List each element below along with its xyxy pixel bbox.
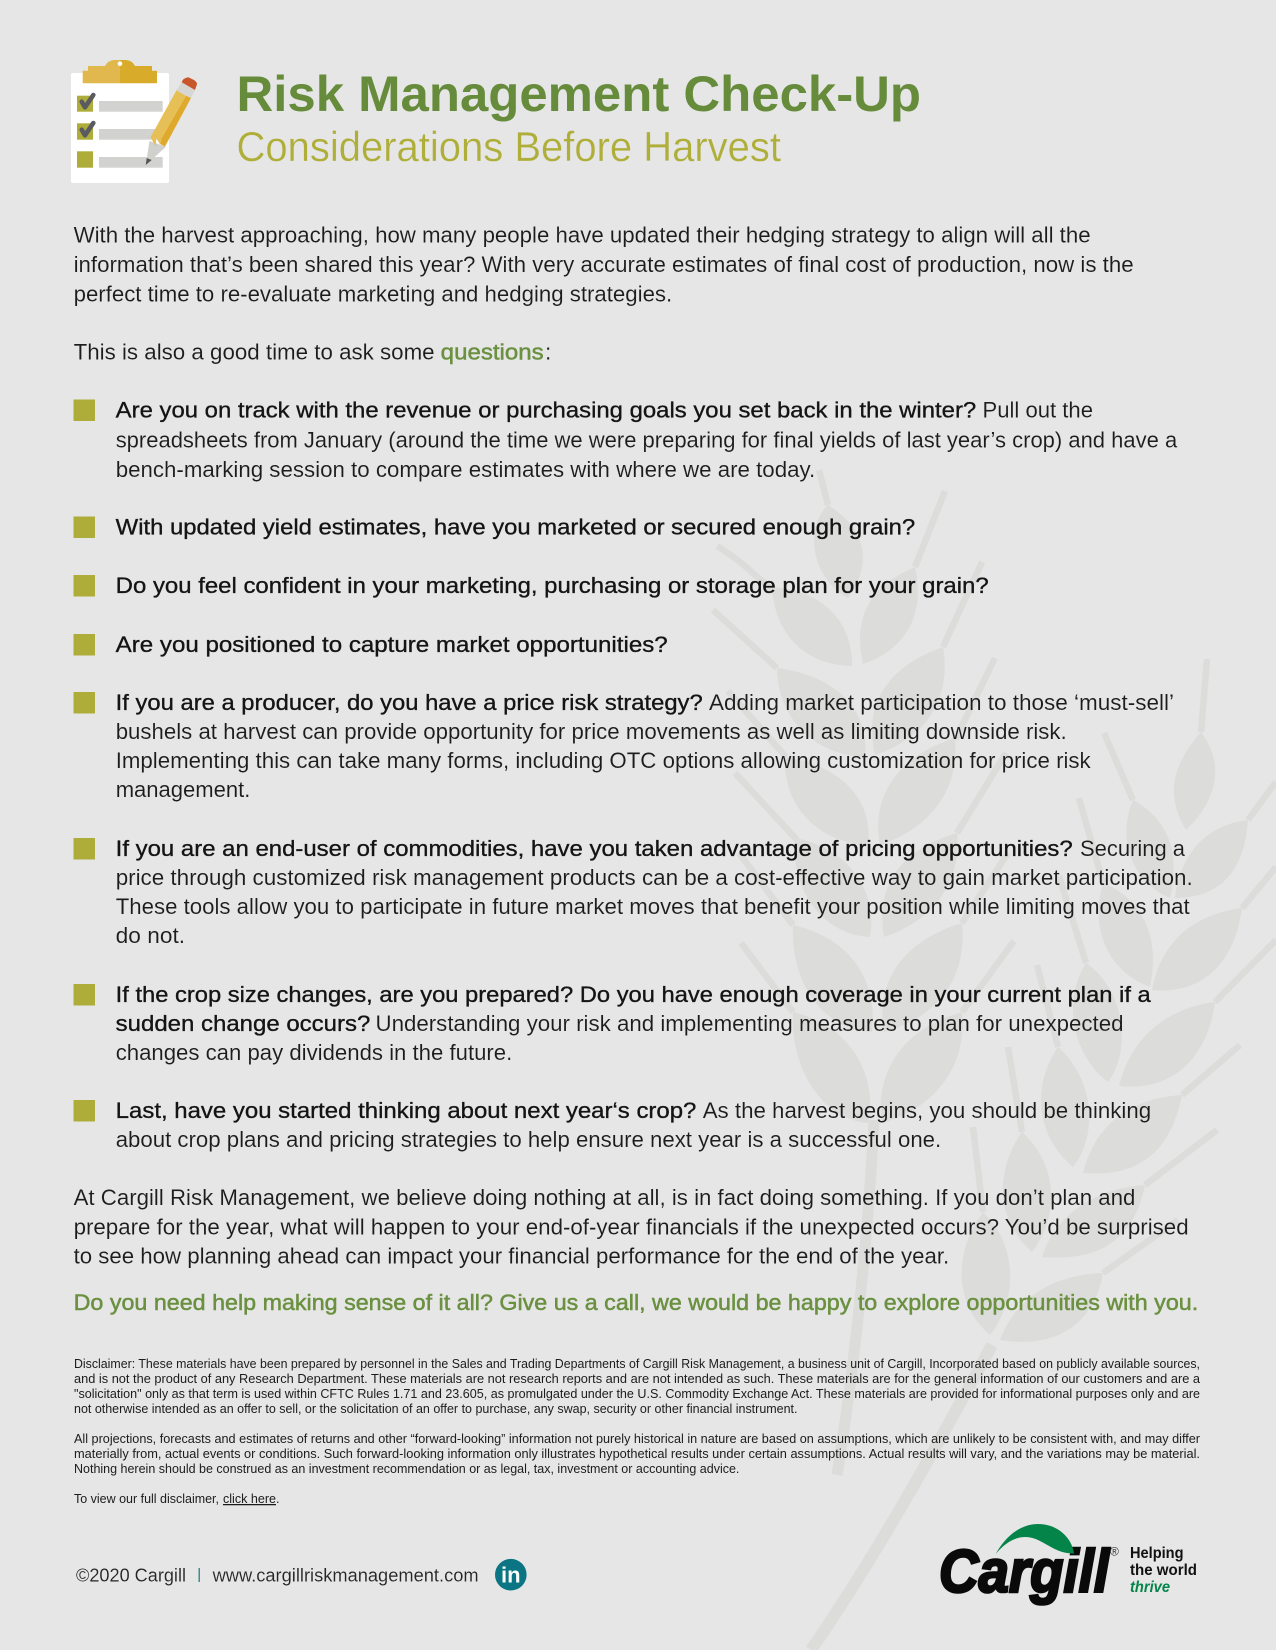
question 1 — [74, 397, 1178, 482]
intro paragraph: information that’s been shared this year? With very accurate estimates of final cost of production, now is the — [74, 252, 1134, 277]
question 6: do not. — [116, 923, 185, 948]
intro paragraph: perfect time to re-evaluate marketing and hedging strategies. — [74, 282, 672, 306]
question 7 — [74, 982, 1151, 1065]
question 7: sudden change occurs? — [116, 1011, 370, 1036]
question 6 — [74, 836, 1193, 948]
Cargill logo: the world — [1130, 1562, 1197, 1579]
full disclaimer link line: To view our full disclaimer, — [74, 1492, 219, 1506]
question 8 — [74, 1098, 1151, 1152]
question 1: spreadsheets from January (around the time we were preparing for final yields of last year’s crop) and have a — [116, 428, 1178, 452]
questions lead-in: questions — [441, 339, 544, 364]
disclaimer paragraph 1: not otherwise intended as an offer to sell, or the solicitation of an offer to purchase, any swap, security or other financial instrument. — [74, 1402, 798, 1416]
question 4: Are you positioned to capture market opportunities? — [116, 632, 668, 657]
closing paragraph — [74, 1185, 1189, 1268]
footer copyright and website: ©2020 Cargill — [76, 1565, 186, 1586]
disclaimer paragraph 1: "solicitation" only as that term is used within CFTC Rules 1.71 and 23.605, as promulgated under the U.S. Commodity Exchange Act. These materials are provided for informational purposes only and are — [74, 1387, 1200, 1401]
full disclaimer link line: click here — [223, 1492, 276, 1506]
full disclaimer link line: . — [276, 1492, 280, 1506]
closing paragraph: to see how planning ahead can impact your financial performance for the end of the year. — [74, 1244, 949, 1268]
questions lead-in: This is also a good time to ask some — [74, 339, 435, 364]
intro paragraph: With the harvest approaching, how many people have updated their hedging strategy to align will all the — [74, 223, 1091, 248]
question 5: If you are a producer, do you have a price risk strategy? — [116, 690, 703, 715]
question 1: Pull out the — [982, 397, 1093, 422]
question 6: Securing a — [1080, 836, 1185, 861]
call to action: Do you need help making sense of it all? Give us a call, we would be happy to explore opportunities with you. — [74, 1290, 1198, 1315]
subtitle: Considerations Before Harvest — [236, 123, 781, 170]
closing paragraph: At Cargill Risk Management, we believe doing nothing at all, is in fact doing something. If you don’t plan and — [74, 1185, 1135, 1210]
question 5 — [74, 690, 1174, 802]
question 5: Adding market participation to those ‘must-sell’ — [709, 690, 1174, 715]
icon: LinkedIn — [495, 1559, 527, 1590]
question 6: These tools allow you to participate in future market moves that benefit your position while limiting moves that — [116, 894, 1190, 919]
question 7: Understanding your risk and implementing measures to plan for unexpected — [376, 1011, 1124, 1036]
question 6: If you are an end-user of commodities, have you taken advantage of pricing opportunities? — [116, 836, 1073, 861]
question 1: Are you on track with the revenue or purchasing goals you set back in the winter? — [116, 397, 976, 422]
footer copyright and website: www.cargillriskmanagement.com — [212, 1565, 479, 1586]
title: Risk Management Check-Up — [236, 66, 921, 122]
Cargill logo — [939, 1524, 1197, 1605]
question 3: Do you feel confident in your marketing, purchasing or storage plan for your grain? — [116, 573, 989, 598]
question 5: bushels at harvest can provide opportunity for price movements as well as limiting downside risk. — [116, 719, 1067, 744]
disclaimer paragraph 1: and is not the product of any Research Department. These materials are not research reports and are not intended as such. These materials are for the general information of our customers and are a — [74, 1372, 1200, 1386]
question 6: price through customized risk management products can be a cost-effective way to gain market participation. — [116, 865, 1193, 890]
question 7: changes can pay dividends in the future. — [116, 1040, 512, 1065]
icon: LinkedIn: in — [501, 1562, 521, 1588]
question 5: management. — [116, 777, 250, 802]
Cargill logo: Cargill — [939, 1538, 1110, 1605]
Cargill logo: ® — [1110, 1544, 1119, 1558]
Cargill logo: Helping — [1130, 1545, 1184, 1562]
question 8: about crop plans and pricing strategies to help ensure next year is a successful one. — [116, 1127, 941, 1152]
closing paragraph: prepare for the year, what will happen to your end-of-year financials if the unexpected occurs? You’d be surprised — [74, 1214, 1189, 1240]
footer copyright and website — [76, 1565, 479, 1586]
background wheat illustration — [713, 470, 1276, 1650]
disclaimer paragraph 1: Disclaimer: These materials have been prepared by personnel in the Sales and Trading Departments of Cargill Risk Management, a business unit of Cargill, Incorporated based on publicly available sources, — [74, 1357, 1200, 1371]
question 1: bench-marking session to compare estimates with where we are today. — [116, 457, 815, 482]
question 5: Implementing this can take many forms, including OTC options allowing customization for price risk — [116, 748, 1091, 773]
icon: clipboard with checklist and pencil — [71, 60, 197, 183]
Cargill logo: thrive — [1130, 1579, 1170, 1596]
disclaimer paragraph 2: materially from, actual events or conditions. Such forward-looking information only illustrates hypothetical results under certain assumptions. Actual results will vary, and the variations may be material. — [74, 1447, 1200, 1461]
question 7: If the crop size changes, are you prepared? Do you have enough coverage in your current plan if a — [116, 982, 1151, 1007]
disclaimer paragraph 2 — [74, 1432, 1200, 1476]
question 8: As the harvest begins, you should be thinking — [703, 1098, 1151, 1123]
questions lead-in: : — [545, 339, 551, 364]
disclaimer paragraph 2: Nothing herein should be construed as an investment recommendation or as legal, tax, investment or accounting advice. — [74, 1462, 739, 1476]
question 2: With updated yield estimates, have you marketed or secured enough grain? — [116, 514, 915, 539]
intro paragraph — [74, 223, 1134, 306]
disclaimer paragraph 2: All projections, forecasts and estimates of returns and other “forward-looking” information not purely historical in nature are based on assumptions, which are unlikely to be consistent with, and may differ — [74, 1432, 1200, 1446]
question 8: Last, have you started thinking about next year‘s crop? — [116, 1098, 696, 1123]
disclaimer paragraph 1 — [74, 1357, 1200, 1416]
